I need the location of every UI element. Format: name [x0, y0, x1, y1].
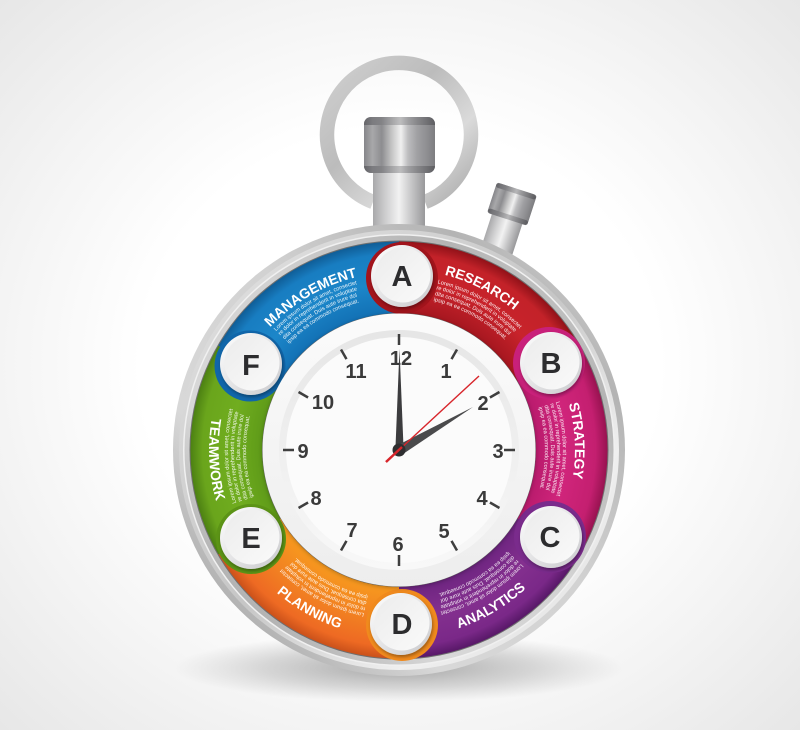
text block: analytics: re dolor in reprehenderit in voluptate: [440, 560, 519, 608]
panel: management: [264, 268, 359, 344]
clock numerals: 2: [477, 393, 489, 415]
badge: E: E: [241, 523, 261, 555]
segmented colour band: [128, 189, 670, 711]
badge: A: A: [392, 261, 413, 293]
badge: F: [214, 330, 286, 402]
panel: research: [434, 266, 522, 340]
text block: analytics: dita consequat. Duis aute irure dol: [440, 556, 514, 604]
icon: stopwatch top ring: [327, 63, 471, 202]
badge: E: [216, 504, 286, 574]
clock numerals: 9: [297, 441, 309, 463]
text block: management: ipsip ea ea commodo consequat.: [286, 299, 359, 344]
ground shadow: [174, 634, 624, 702]
icon: side pusher button: [477, 182, 537, 258]
badge: A: [366, 242, 438, 314]
badge: B: B: [541, 348, 561, 380]
panel: planning: [277, 558, 368, 628]
text block: strategy: [538, 402, 567, 496]
text block: teamwork: Lorem ipsum dolor sit amet, consectet: [224, 408, 236, 504]
text block: planning: dita consequat. Duis aute irure dol: [290, 562, 366, 605]
badge: B: [513, 327, 585, 399]
heading: analytics: ANALYTICS: [458, 582, 524, 628]
text block: planning: re dolor in reprehenderit in voluptate: [286, 566, 366, 610]
text block: management: dita consequat. Duis aute irure dol: [283, 292, 357, 339]
text block: analytics: Lorem ipsum dolor sit amet, consectet: [440, 564, 524, 615]
heading: research: RESEARCH: [445, 266, 520, 310]
text block: planning: ipsip ea ea commodo consequat.: [295, 558, 368, 600]
clock numerals: 6: [392, 534, 404, 556]
text block: teamwork: [224, 408, 254, 504]
badge: D: [366, 589, 438, 661]
heading: management: MANAGEMENT: [264, 268, 355, 327]
badge: F: F: [242, 350, 260, 382]
clock numerals: 8: [310, 488, 322, 510]
clock numerals: 11: [345, 361, 367, 383]
text block: strategy: re dolor in reprehenderit in voluptate: [550, 403, 561, 494]
clock numerals: 3: [492, 441, 504, 463]
clock numerals: 7: [346, 520, 358, 542]
text block: strategy: Lorem ipsum dolor sit amet, consectet: [556, 402, 567, 496]
heading: teamwork: TEAMWORK: [209, 419, 226, 502]
panel: teamwork: [209, 408, 254, 504]
clock ticks: [283, 334, 515, 566]
panel: analytics: [438, 552, 524, 628]
heading: planning: PLANNING: [277, 586, 342, 628]
panel: strategy: [538, 402, 585, 496]
clock hands: [386, 349, 479, 462]
icon: main stem and crown: [364, 117, 435, 226]
clock numerals: 4: [476, 488, 488, 510]
badge: C: C: [540, 522, 561, 554]
text block: analytics: ipsip ea ea commodo consequat.: [438, 552, 511, 597]
text block: strategy: dita consequat. Duis aute irure dol: [544, 405, 555, 490]
badge: C: [514, 501, 586, 573]
text block: strategy: ipsip ea ea commodo consequat.: [538, 406, 549, 488]
badge: D: D: [392, 609, 412, 641]
text block: research: re dolor in reprehenderit in voluptate: [436, 286, 516, 332]
clock numerals: 1: [440, 361, 452, 383]
heading: strategy: STRATEGY: [570, 402, 585, 480]
clock numerals: 12: [390, 348, 412, 370]
text block: teamwork: ipsip ea ea commodo consequat.: [242, 416, 254, 498]
text block: planning: Lorem ipsum dolor sit amet, consectet: [280, 569, 364, 617]
text block: teamwork: re dolor in reprehenderit in voluptate: [230, 412, 242, 502]
clock face: [262, 314, 536, 586]
clock numerals: [297, 348, 504, 556]
text block: management: re dolor in reprehenderit in voluptate: [278, 288, 357, 336]
text block: teamwork: dita consequat. Duis aute irure dol: [236, 414, 248, 500]
text block: research: dita consequat. Duis aute irure dol: [435, 292, 512, 335]
text block: management: Lorem ipsum dolor sit amet, consectet: [274, 280, 357, 331]
clock numerals: 10: [312, 392, 334, 414]
text block: research: Lorem ipsum dolor sit amet, consectet: [438, 280, 522, 329]
text block: research: ipsip ea ea commodo consequat.: [434, 297, 506, 340]
clock numerals: 5: [438, 521, 450, 543]
stopwatch metal case: [173, 224, 625, 676]
